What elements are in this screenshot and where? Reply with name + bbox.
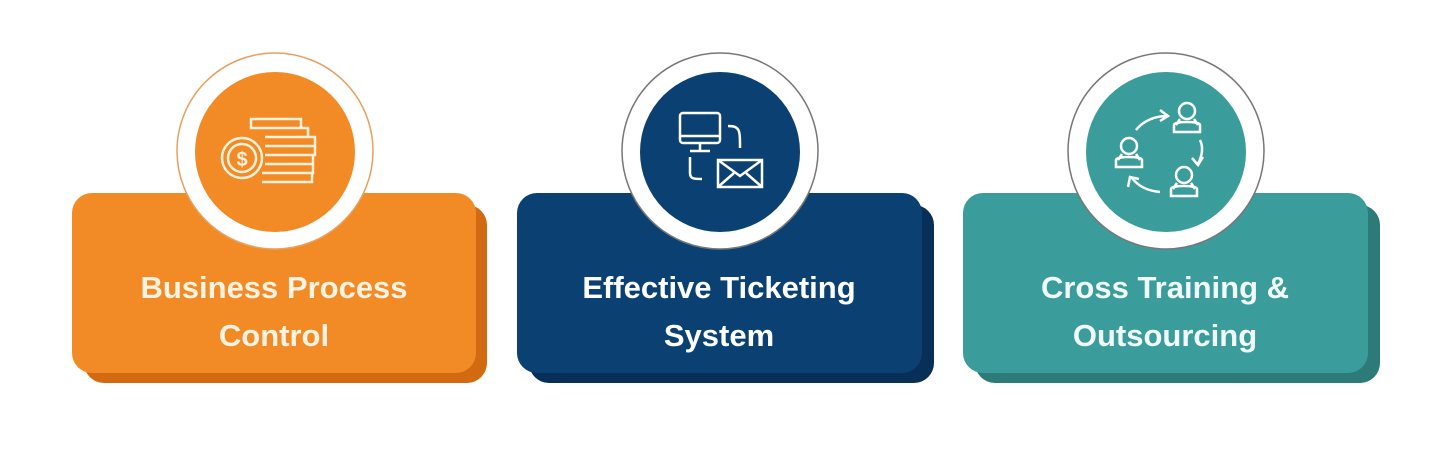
panel: effective ticketing system: System [664,318,774,353]
panel: cross training & outsourcing: Outsourcing [1073,318,1257,353]
label text: Effective Ticketing [582,270,856,305]
panel: effective ticketing system [517,53,934,383]
label text: Cross Training & [1041,270,1289,305]
label text: Business Process [140,270,408,305]
icon circle: computer and mail [622,53,818,249]
panel: business process control [72,53,487,383]
icon circle: people cycle [1068,53,1264,249]
icon circle: coins [177,53,373,249]
icon circle: coins: $ [236,149,248,171]
panel: cross training & outsourcing [963,53,1380,383]
panel: business process control: Control [219,318,329,353]
